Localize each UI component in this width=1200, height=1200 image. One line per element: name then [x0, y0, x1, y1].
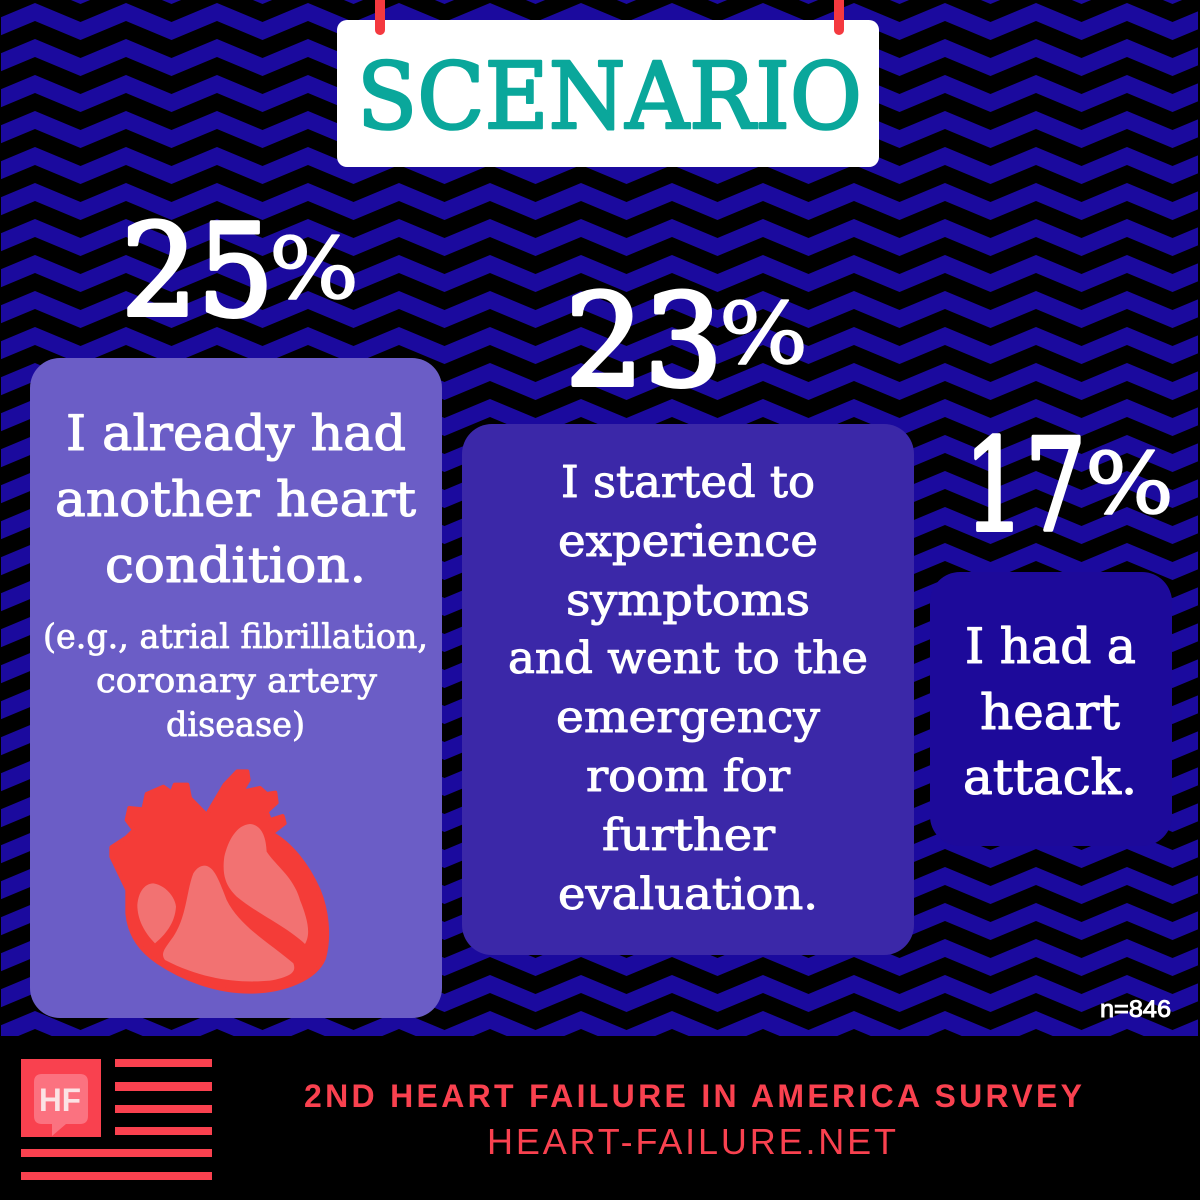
statistic: 23%: 23 [565, 267, 723, 415]
footer band [0, 1036, 1200, 1200]
panel 2 text: further [602, 810, 776, 861]
logo speech bubble [34, 1074, 88, 1136]
panel 1 main text: condition. [105, 537, 366, 594]
panel: another heart condition [30, 358, 442, 1018]
panel 3 text: I had a [965, 618, 1136, 675]
panel 1 examples text: disease) [166, 705, 305, 745]
survey name: 2ND HEART FAILURE IN AMERICA SURVEY [304, 1078, 1082, 1114]
icon: anatomical heart [111, 771, 327, 992]
panel 1 main text: I already had [66, 405, 406, 462]
statistic: 25%: % [269, 220, 359, 318]
panel 3 text: attack. [963, 749, 1137, 806]
panel 2 text: and went to the [508, 633, 868, 684]
logo initials: HF [39, 1082, 81, 1118]
panel 2 text: emergency [556, 692, 820, 743]
left hanger [375, 0, 385, 35]
panel 2 text: room for [586, 751, 791, 802]
statistic: 17%: 17 [964, 412, 1086, 560]
panel 2 text: experience [558, 516, 818, 567]
statistic: 23%: % [719, 285, 808, 383]
statistic: 17%: % [1085, 435, 1174, 533]
panel 2 text [508, 457, 868, 920]
sample size note: n=846 [1100, 996, 1171, 1023]
panel 1 main text [55, 405, 416, 594]
panel 2 text: evaluation. [558, 869, 818, 920]
website: HEART-FAILURE.NET [487, 1121, 896, 1162]
panel 2 text: symptoms [566, 575, 810, 626]
panel 1 examples text: coronary artery [96, 661, 378, 701]
statistic: 25%: 25 [121, 197, 274, 345]
right hanger [834, 0, 844, 35]
panel 3 text [963, 618, 1137, 806]
statistic: 25% [121, 197, 359, 345]
logo: HF flag [21, 1059, 212, 1180]
panel 1 examples text [43, 617, 428, 745]
panel: experienced symptoms [462, 424, 914, 955]
flag stripes [21, 1059, 212, 1180]
title sign [337, 0, 879, 167]
panel 1 examples text: (e.g., atrial fibrillation, [43, 617, 428, 657]
panel 1 main text: another heart [55, 471, 416, 528]
panel: heart attack [930, 572, 1172, 846]
panel 2 text: I started to [561, 457, 815, 508]
title: SCENARIO [357, 43, 862, 150]
statistic: 23% [565, 267, 808, 415]
panel 3 text: heart [980, 684, 1120, 741]
